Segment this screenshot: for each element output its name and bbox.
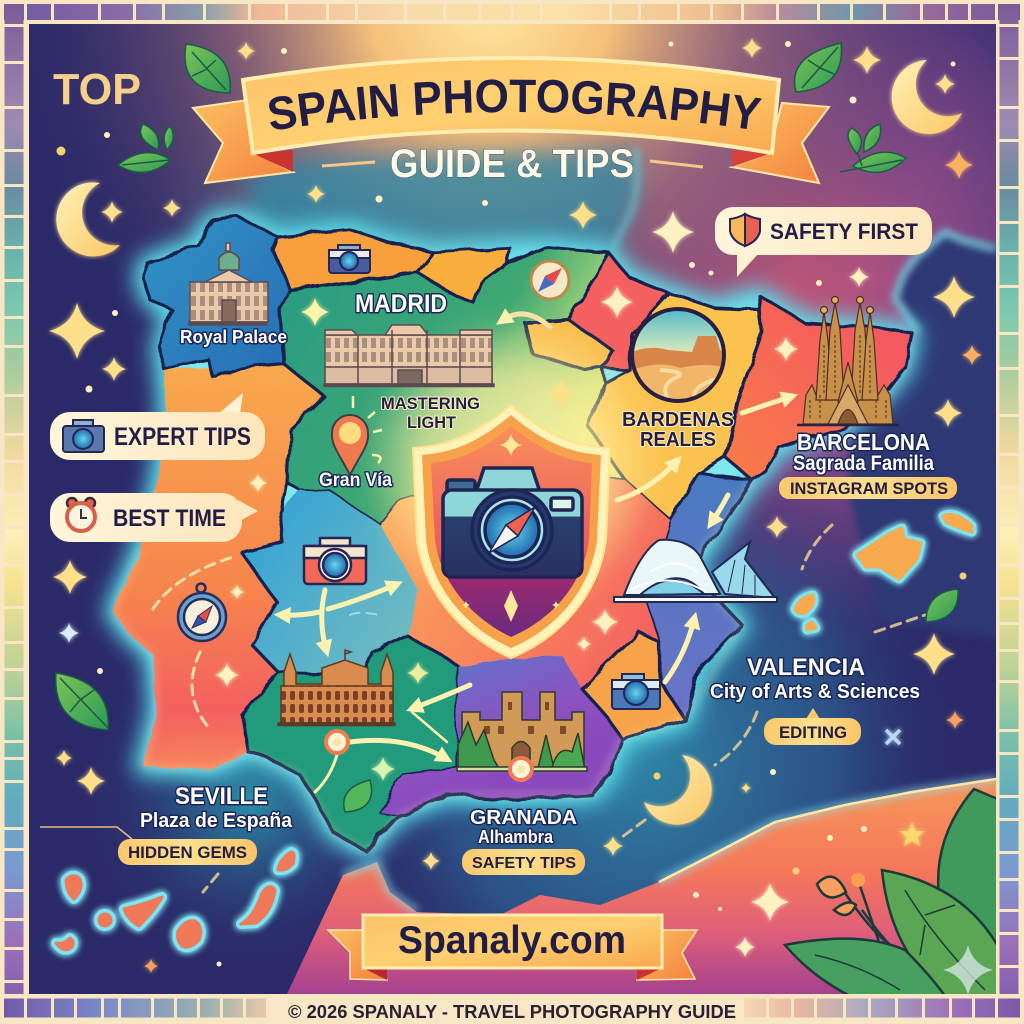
- back leaf: [936, 788, 996, 940]
- icon: Bardenas Reales landscape: [630, 308, 728, 405]
- corner foliage: [785, 789, 1000, 996]
- region: Asturias: [273, 230, 433, 290]
- ribbon body: [363, 915, 662, 968]
- sparkle mark: [943, 945, 993, 995]
- region: Portugal: [113, 363, 325, 769]
- callout: Best Time: [50, 493, 258, 542]
- right tail: [637, 930, 697, 980]
- leaf: lower left: [56, 673, 108, 730]
- label: Madrid: MADRID: [355, 290, 447, 318]
- leaf: top right: [794, 43, 841, 92]
- label: Bardenas Reales: [622, 409, 734, 451]
- leaf: right: [926, 589, 958, 622]
- region: Cantabria: [417, 248, 510, 302]
- africa coast: [287, 779, 996, 994]
- label: Seville: SEVILLE: [175, 783, 268, 810]
- icon: Murcia camera: [612, 674, 660, 709]
- region: central: [380, 470, 670, 689]
- subtitle: GUIDE & TIPS: [390, 142, 634, 186]
- label: Mastering Light: MASTERING: [381, 394, 480, 413]
- icon: marker circle: [326, 731, 348, 753]
- left tail: [193, 100, 293, 183]
- left fold: [363, 968, 387, 980]
- berry: [851, 873, 865, 887]
- balearic islands: [795, 514, 972, 630]
- icon: marker circle Granada: [510, 758, 532, 780]
- region: Murcia: [582, 632, 685, 739]
- coast highlight: [113, 480, 752, 852]
- label: Gran Via: Gran Vía: [319, 470, 392, 491]
- label: City of Arts and Sciences: City of Arts & Sciences: [710, 681, 920, 703]
- callout: Safety First: [715, 207, 932, 277]
- icon: location pin: [332, 396, 382, 475]
- footer copyright: © 2026 SPANALY - TRAVEL PHOTOGRAPHY GUIDE: [288, 1002, 736, 1022]
- icon: Alhambra castle: [457, 692, 587, 771]
- region: Extremadura: [243, 490, 420, 675]
- moon: left: [56, 182, 120, 256]
- tag: Editing: [764, 708, 861, 745]
- icon: Madrid palace: [324, 325, 494, 386]
- label: Granada: GRANADA: [470, 807, 577, 829]
- leaves: [56, 43, 958, 812]
- label: Bardenas Reales: REALES: [640, 429, 716, 451]
- label: Mastering Light: LIGHT: [407, 413, 457, 432]
- dashed routes: [153, 525, 925, 892]
- callout: Best Time: BEST TIME: [113, 505, 226, 532]
- label: Royal Palace: Royal Palace: [180, 327, 287, 347]
- right tail: [732, 103, 829, 183]
- canary islands: [56, 852, 294, 950]
- right fold: [637, 968, 662, 980]
- tag: Instagram Spots: INSTAGRAM SPOTS: [790, 480, 948, 498]
- france coast glow: [895, 232, 996, 332]
- tag: Safety Tips: [462, 849, 585, 875]
- label: Sagrada Familia: Sagrada Familia: [793, 452, 934, 475]
- callout: Expert Tips: EXPERT TIPS: [114, 423, 251, 451]
- icon: shield: [730, 214, 760, 246]
- moon: top right: [892, 60, 962, 134]
- shield halo: [361, 315, 661, 615]
- tag: Hidden Gems: HIDDEN GEMS: [128, 843, 247, 862]
- banner: title ribbon: [191, 56, 831, 184]
- label: Bardenas Reales: BARDENAS: [622, 409, 734, 431]
- label: Alhambra: Alhambra: [478, 827, 554, 847]
- tag: Editing: EDITING: [779, 723, 847, 742]
- region: Valencia: [645, 473, 752, 720]
- icon: Plaza de Espana palace: [278, 650, 395, 726]
- lower leaf: [785, 939, 945, 996]
- leaf: top left: [185, 44, 230, 93]
- northern sea glow line: [612, 148, 637, 250]
- left tail: [328, 930, 387, 980]
- region: Galicia: [142, 217, 290, 377]
- tag: Safety Tips: SAFETY TIPS: [472, 855, 576, 872]
- map glow: [113, 217, 912, 852]
- front leaf: [882, 870, 1000, 996]
- branch: [845, 880, 890, 945]
- icon: shield sparkles: [462, 434, 560, 622]
- bud: [817, 877, 846, 897]
- region: Aragon: [589, 293, 762, 520]
- leaf sprig: left: [118, 124, 173, 172]
- region: Rioja: [525, 320, 612, 370]
- title text: SPAIN PHOTOGRAPHY: [269, 79, 762, 130]
- icon: pocket compass: [178, 584, 226, 641]
- region: Navarra: [569, 253, 669, 370]
- central shield: [413, 405, 610, 658]
- icon: map compass: [531, 261, 569, 299]
- map of Iberia: [113, 217, 912, 852]
- region: Catalonia: [725, 295, 912, 480]
- right fold: [732, 150, 769, 167]
- leaf: map green: [344, 780, 372, 812]
- label: TOP: TOP: [53, 65, 141, 114]
- icon: Sagrada Familia: [797, 296, 899, 425]
- icon: red camera: [304, 538, 366, 584]
- website text: Spanaly.com: [398, 919, 626, 962]
- region: Castilla green: [278, 237, 625, 525]
- banner: website ribbon: [328, 915, 697, 980]
- label: Barcelona: BARCELONA: [797, 429, 930, 455]
- callout: Safety First: SAFETY FIRST: [770, 219, 919, 244]
- icon: alarm clock: [67, 498, 95, 531]
- region: Andalusia: [242, 635, 457, 852]
- icon: Royal Palace building: [189, 243, 268, 325]
- icon: camera: [63, 420, 104, 452]
- left fold: [254, 150, 293, 172]
- callout: Expert Tips: [50, 393, 265, 460]
- icon: City of Arts and Sciences: [614, 540, 777, 602]
- moon: bottom: [644, 755, 712, 825]
- label: Valencia: VALENCIA: [747, 654, 865, 681]
- icon: main camera: [443, 468, 582, 577]
- tag: Hidden Gems: [40, 827, 257, 865]
- label: Plaza de Espana: Plaza de España: [140, 810, 293, 832]
- france sea panel: [848, 232, 1010, 640]
- icon: top camera: [329, 245, 370, 273]
- arrows: [282, 314, 790, 792]
- bud small: [834, 902, 856, 915]
- leaf sprig: right: [840, 124, 906, 172]
- region: Granada purple: [380, 655, 622, 815]
- label: Mastering Light: [381, 394, 480, 432]
- ribbon body: [243, 58, 779, 153]
